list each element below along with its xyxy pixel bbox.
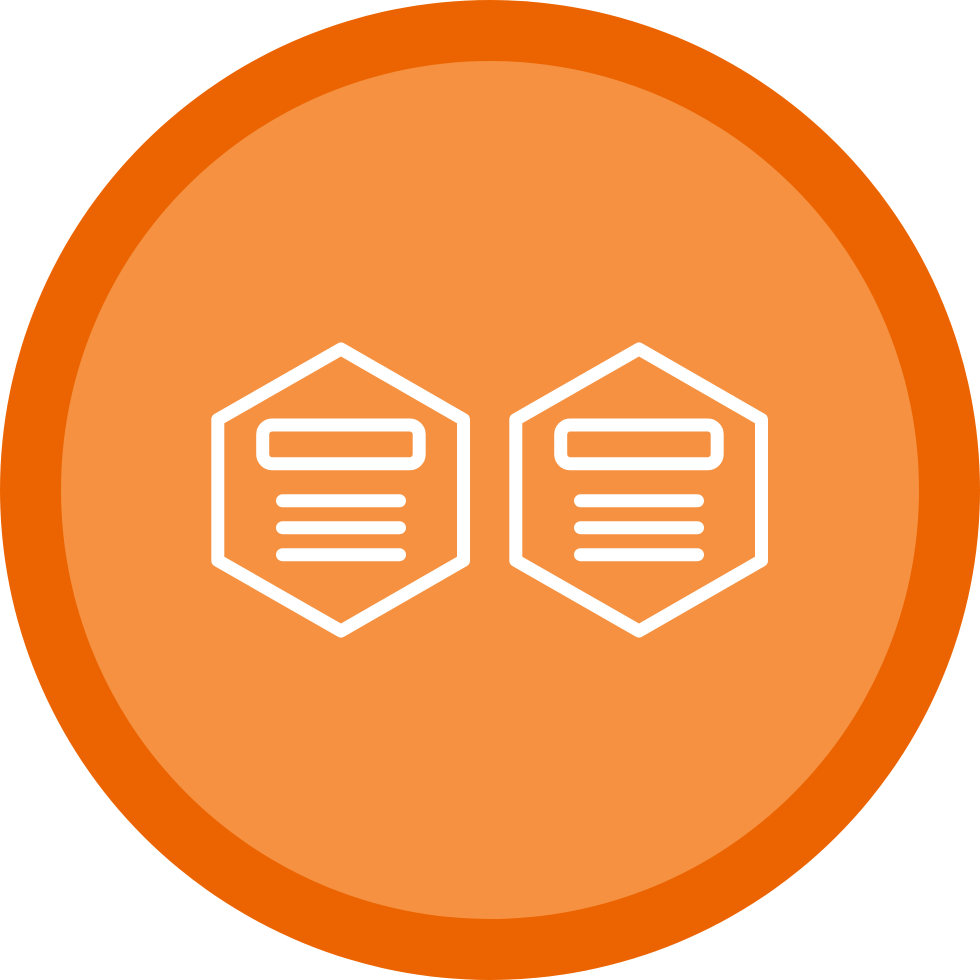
- inner circle: [61, 61, 919, 919]
- icon: right hexagon document: [516, 349, 762, 631]
- icon: left hexagon document: [218, 349, 464, 631]
